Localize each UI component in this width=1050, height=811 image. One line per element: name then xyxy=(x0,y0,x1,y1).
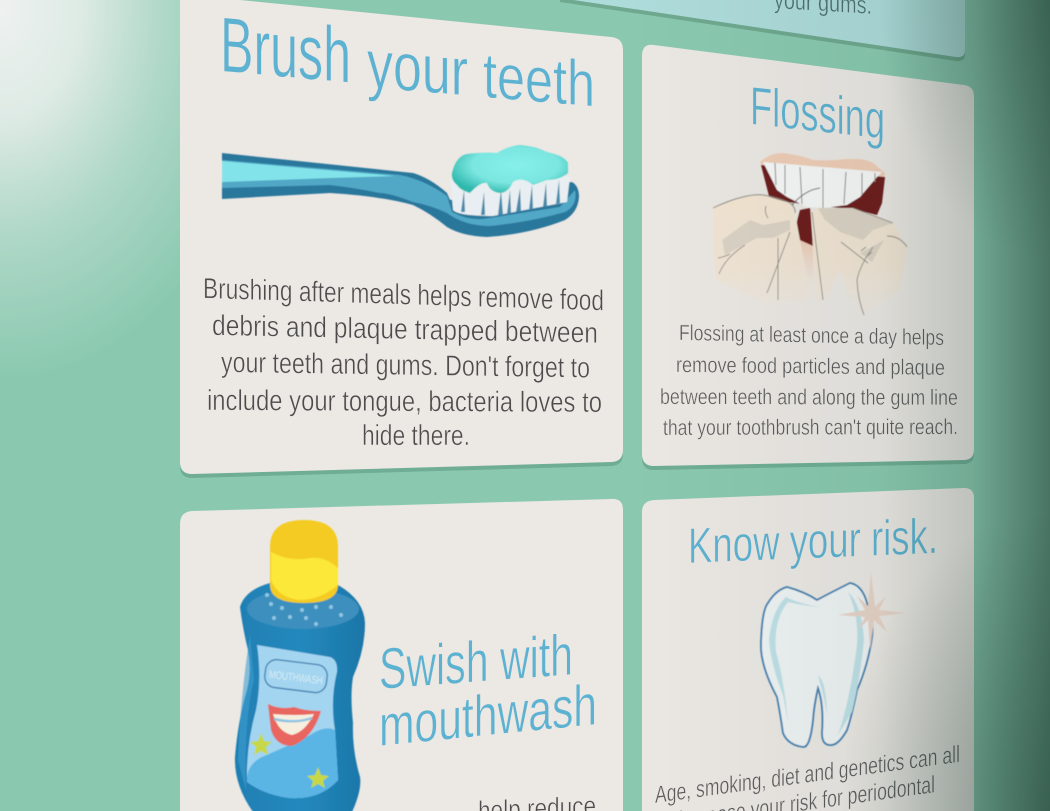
text: risk body xyxy=(655,741,965,811)
heading: swish with mouthwash: mouthwash xyxy=(379,672,597,759)
hand: right fingers xyxy=(812,208,907,315)
toothpaste xyxy=(452,145,568,193)
hand: left fingers xyxy=(713,195,812,305)
panel: know your risk xyxy=(642,488,974,811)
icon: mouthwash bottle xyxy=(235,520,365,811)
bottle tag: MOUTHWASH xyxy=(268,669,323,687)
heading: brush your teeth: your xyxy=(367,26,468,111)
text: brushing body: include your tongue, bacteria loves to xyxy=(207,385,602,419)
left light glow xyxy=(0,0,180,400)
heading: swish with mouthwash: Swish with xyxy=(379,623,573,702)
text: flossing body xyxy=(660,320,958,440)
text: flossing body: Flossing at least once a day helps xyxy=(679,320,944,350)
icon: tooth xyxy=(761,572,906,747)
right shadow overlays xyxy=(620,0,1050,811)
panel: swish with mouthwash xyxy=(180,499,623,811)
bottle tag xyxy=(264,658,328,694)
text: flossing body: remove food particles and plaque xyxy=(676,352,945,380)
icon: flossing mouth xyxy=(713,153,907,315)
text: flossing body: that your toothbrush can't quite reach. xyxy=(663,414,958,440)
heading: brush your teeth: teeth xyxy=(483,39,595,120)
bottle cap xyxy=(270,520,338,603)
heading: flossing: Flossing xyxy=(750,76,885,151)
sparkle xyxy=(838,572,906,650)
heading: brush your teeth xyxy=(220,0,595,120)
heading: know your risk: Know your risk. xyxy=(688,508,938,574)
text: brushing body: Brushing after meals helps remove food xyxy=(203,273,604,317)
text: brushing body xyxy=(203,273,604,452)
heading: swish with mouthwash xyxy=(379,623,597,759)
text: brushing body: debris and plaque trapped between xyxy=(212,310,598,350)
icon: toothbrush xyxy=(222,145,579,237)
text: brushing body: your teeth and gums. Don't forget to xyxy=(221,347,590,385)
heading: brush your teeth: Brush xyxy=(220,0,351,100)
panel: flossing xyxy=(642,45,974,470)
text: flossing body: between teeth and along the gum line xyxy=(660,384,958,410)
bottle dots xyxy=(265,593,343,626)
bottle smile xyxy=(268,704,321,746)
panel: top partial card xyxy=(560,0,965,61)
text: brushing body: hide there. xyxy=(362,420,470,452)
panel: brush your teeth xyxy=(180,0,623,478)
bottle stars xyxy=(250,733,329,788)
